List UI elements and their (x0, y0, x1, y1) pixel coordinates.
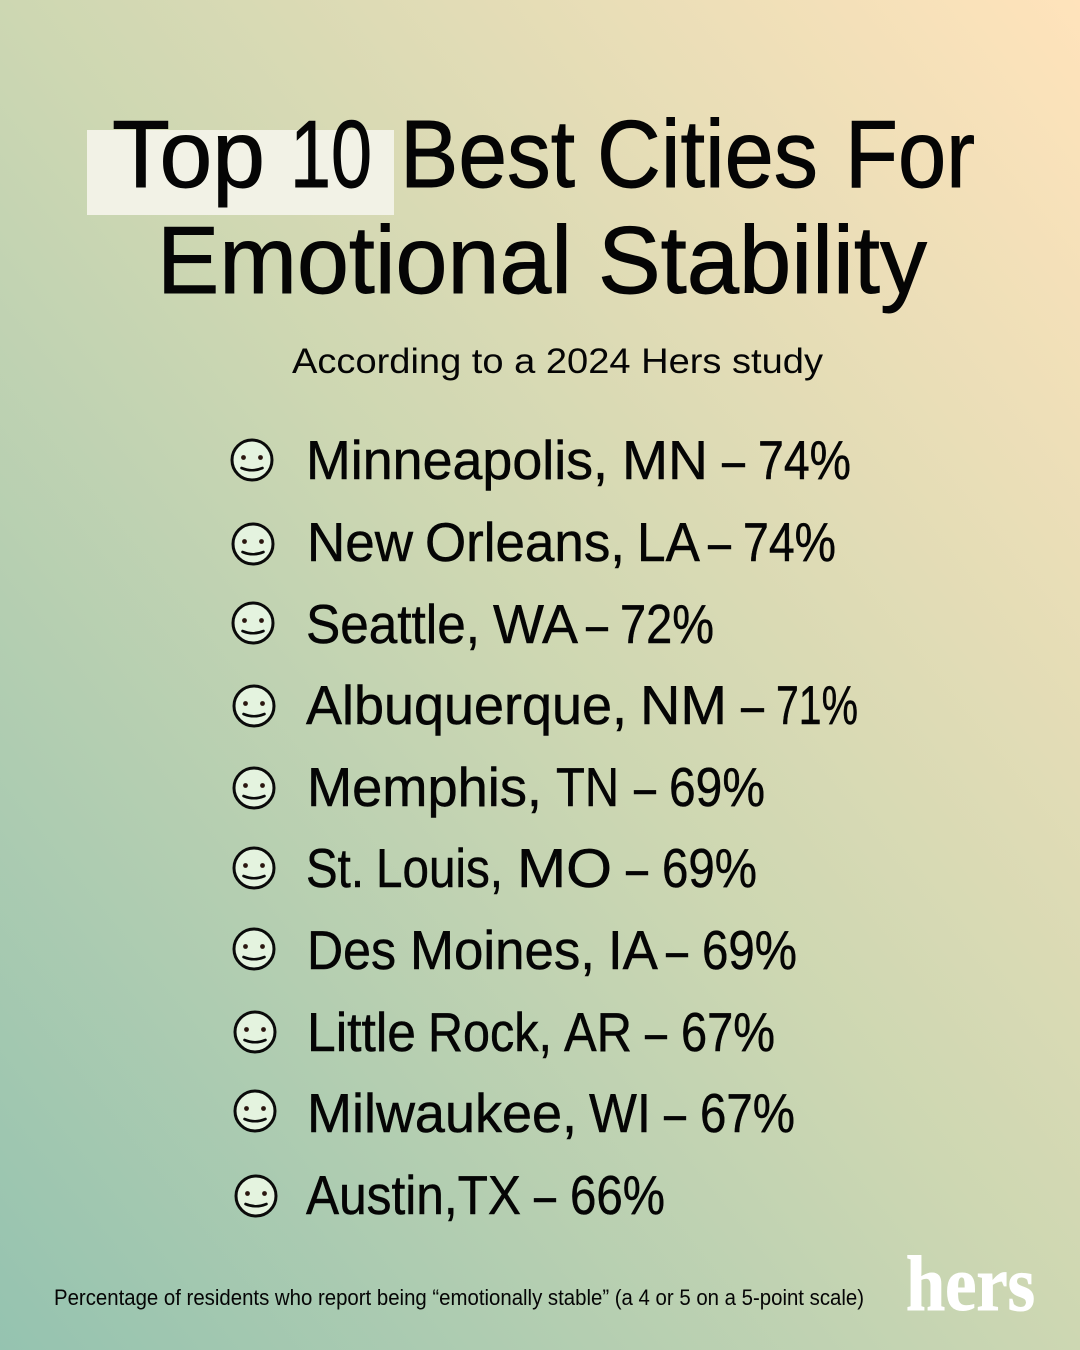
row: New Orleans: New (307, 511, 413, 573)
row: Milwaukee (235, 1082, 795, 1144)
row: Memphis (234, 756, 765, 818)
title: For (845, 101, 975, 208)
subtitle: According to a 2024 Hers study (292, 342, 824, 381)
title: Emotional (157, 207, 572, 314)
row: Little Rock: – (645, 1001, 667, 1063)
row: St. Louis: St. (306, 837, 364, 899)
row: Seattle: – (586, 593, 608, 655)
row: Albuquerque: NM (640, 674, 727, 736)
row: Milwaukee: Milwaukee, (307, 1082, 577, 1144)
row: Des Moines: – (666, 919, 688, 981)
row: Des Moines: Moines, (410, 919, 595, 981)
row: Albuquerque (234, 674, 858, 736)
row: St. Louis: Louis, (376, 837, 503, 899)
title: Top (112, 101, 265, 208)
row: Des Moines (234, 919, 797, 981)
row: Minneapolis: 74% (758, 429, 851, 491)
row: Minneapolis: – (722, 429, 745, 491)
row: Austin: – (534, 1164, 556, 1226)
row: Little Rock: Rock, (428, 1001, 552, 1063)
footnote: Percentage of residents who report being “emotionally stable” (a 4 or 5 on a 5-point scale) (54, 1285, 864, 1310)
row: Des Moines: 69% (702, 919, 797, 981)
row: Albuquerque: – (741, 674, 764, 736)
row: Des Moines: Des (307, 919, 396, 981)
row: Memphis: Memphis, (307, 756, 542, 818)
row: Milwaukee: 67% (700, 1082, 795, 1144)
row: Seattle: 72% (620, 593, 714, 655)
row: Memphis: – (634, 756, 656, 818)
row: Austin: Austin,TX (306, 1164, 521, 1226)
row: St. Louis: 69% (662, 837, 757, 899)
row: Seattle: WA (493, 593, 578, 655)
row: Minneapolis: MN (622, 429, 708, 491)
row: Memphis: TN (556, 756, 619, 818)
title: Best (400, 101, 575, 208)
row: Little Rock (235, 1001, 775, 1063)
row: New Orleans: Orleans, (425, 511, 625, 573)
row: New Orleans: – (708, 511, 731, 573)
row: Milwaukee: WI (589, 1082, 651, 1144)
row: Albuquerque: Albuquerque, (306, 674, 627, 736)
row: Milwaukee: – (664, 1082, 686, 1144)
row: Seattle (233, 593, 714, 655)
title highlight (87, 130, 394, 215)
row: Austin (236, 1164, 665, 1226)
title (112, 101, 975, 314)
row: Minneapolis: Minneapolis, (306, 429, 608, 491)
row: Austin: 66% (570, 1164, 665, 1226)
row: New Orleans (233, 511, 836, 573)
row: Memphis: 69% (669, 756, 765, 818)
row: Seattle: Seattle, (306, 593, 480, 655)
city list (232, 429, 858, 1226)
row: St. Louis (234, 837, 757, 899)
title: Stability (598, 207, 927, 314)
row: New Orleans: 74% (743, 511, 836, 573)
logo: hers: hers (906, 1240, 1035, 1327)
row: Albuquerque: 71% (776, 674, 858, 736)
row: Des Moines: IA (608, 919, 658, 981)
row: New Orleans: LA (637, 511, 700, 573)
row: St. Louis: MO (517, 837, 612, 899)
row: Minneapolis (232, 429, 851, 491)
row: Little Rock: AR (564, 1001, 632, 1063)
row: Little Rock: 67% (681, 1001, 775, 1063)
title: 10 (290, 101, 372, 208)
title: Cities (597, 101, 818, 208)
row: St. Louis: – (626, 837, 648, 899)
row: Little Rock: Little (307, 1001, 416, 1063)
